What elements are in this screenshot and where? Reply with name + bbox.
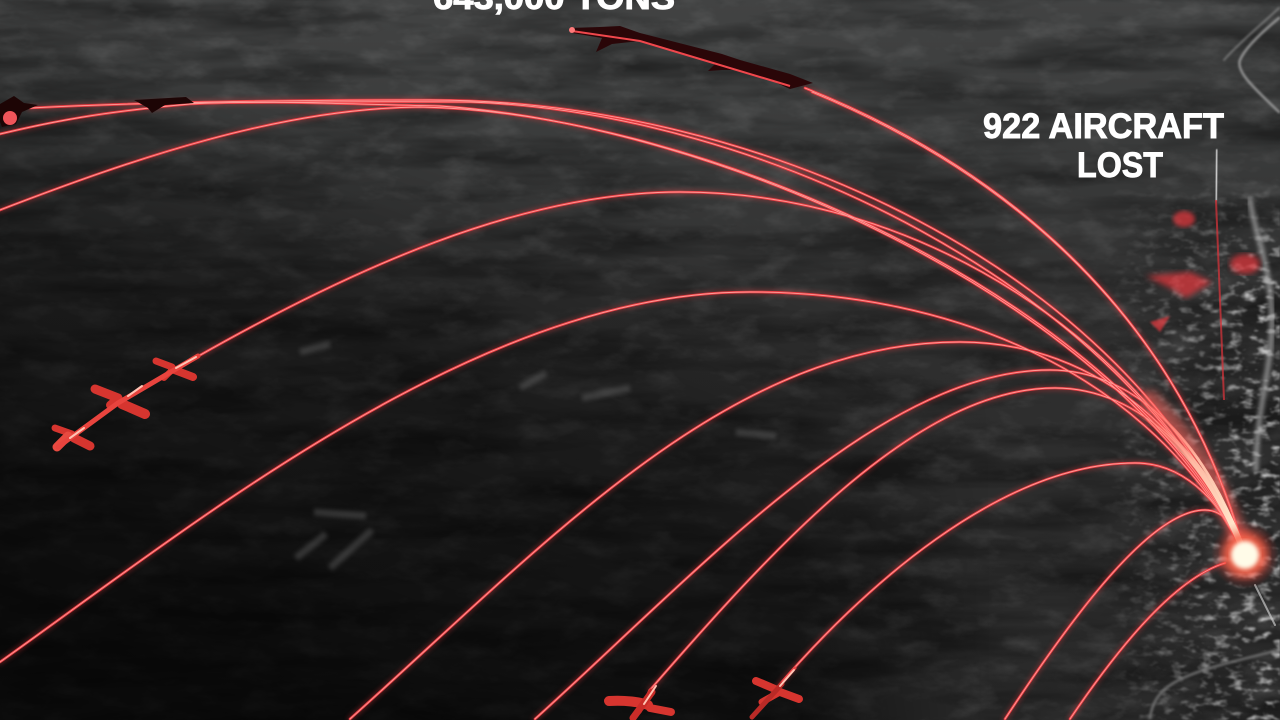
impact burst <box>1211 521 1279 589</box>
label: aircraft lost: LOST <box>1077 146 1163 185</box>
label: aircraft lost: 922 AIRCRAFT <box>983 107 1224 146</box>
aircraft: red planes at bottom <box>609 670 799 718</box>
label: aircraft lost <box>983 107 1224 185</box>
roads and coastline top right <box>1150 8 1279 718</box>
red target markers on the ground <box>1146 200 1260 400</box>
converging hot streak <box>1050 370 1245 555</box>
aircraft: dark planes at upper left <box>0 96 194 127</box>
aircraft: red formation at left <box>55 356 198 447</box>
aircraft: dark bomber formation at top <box>569 26 813 89</box>
